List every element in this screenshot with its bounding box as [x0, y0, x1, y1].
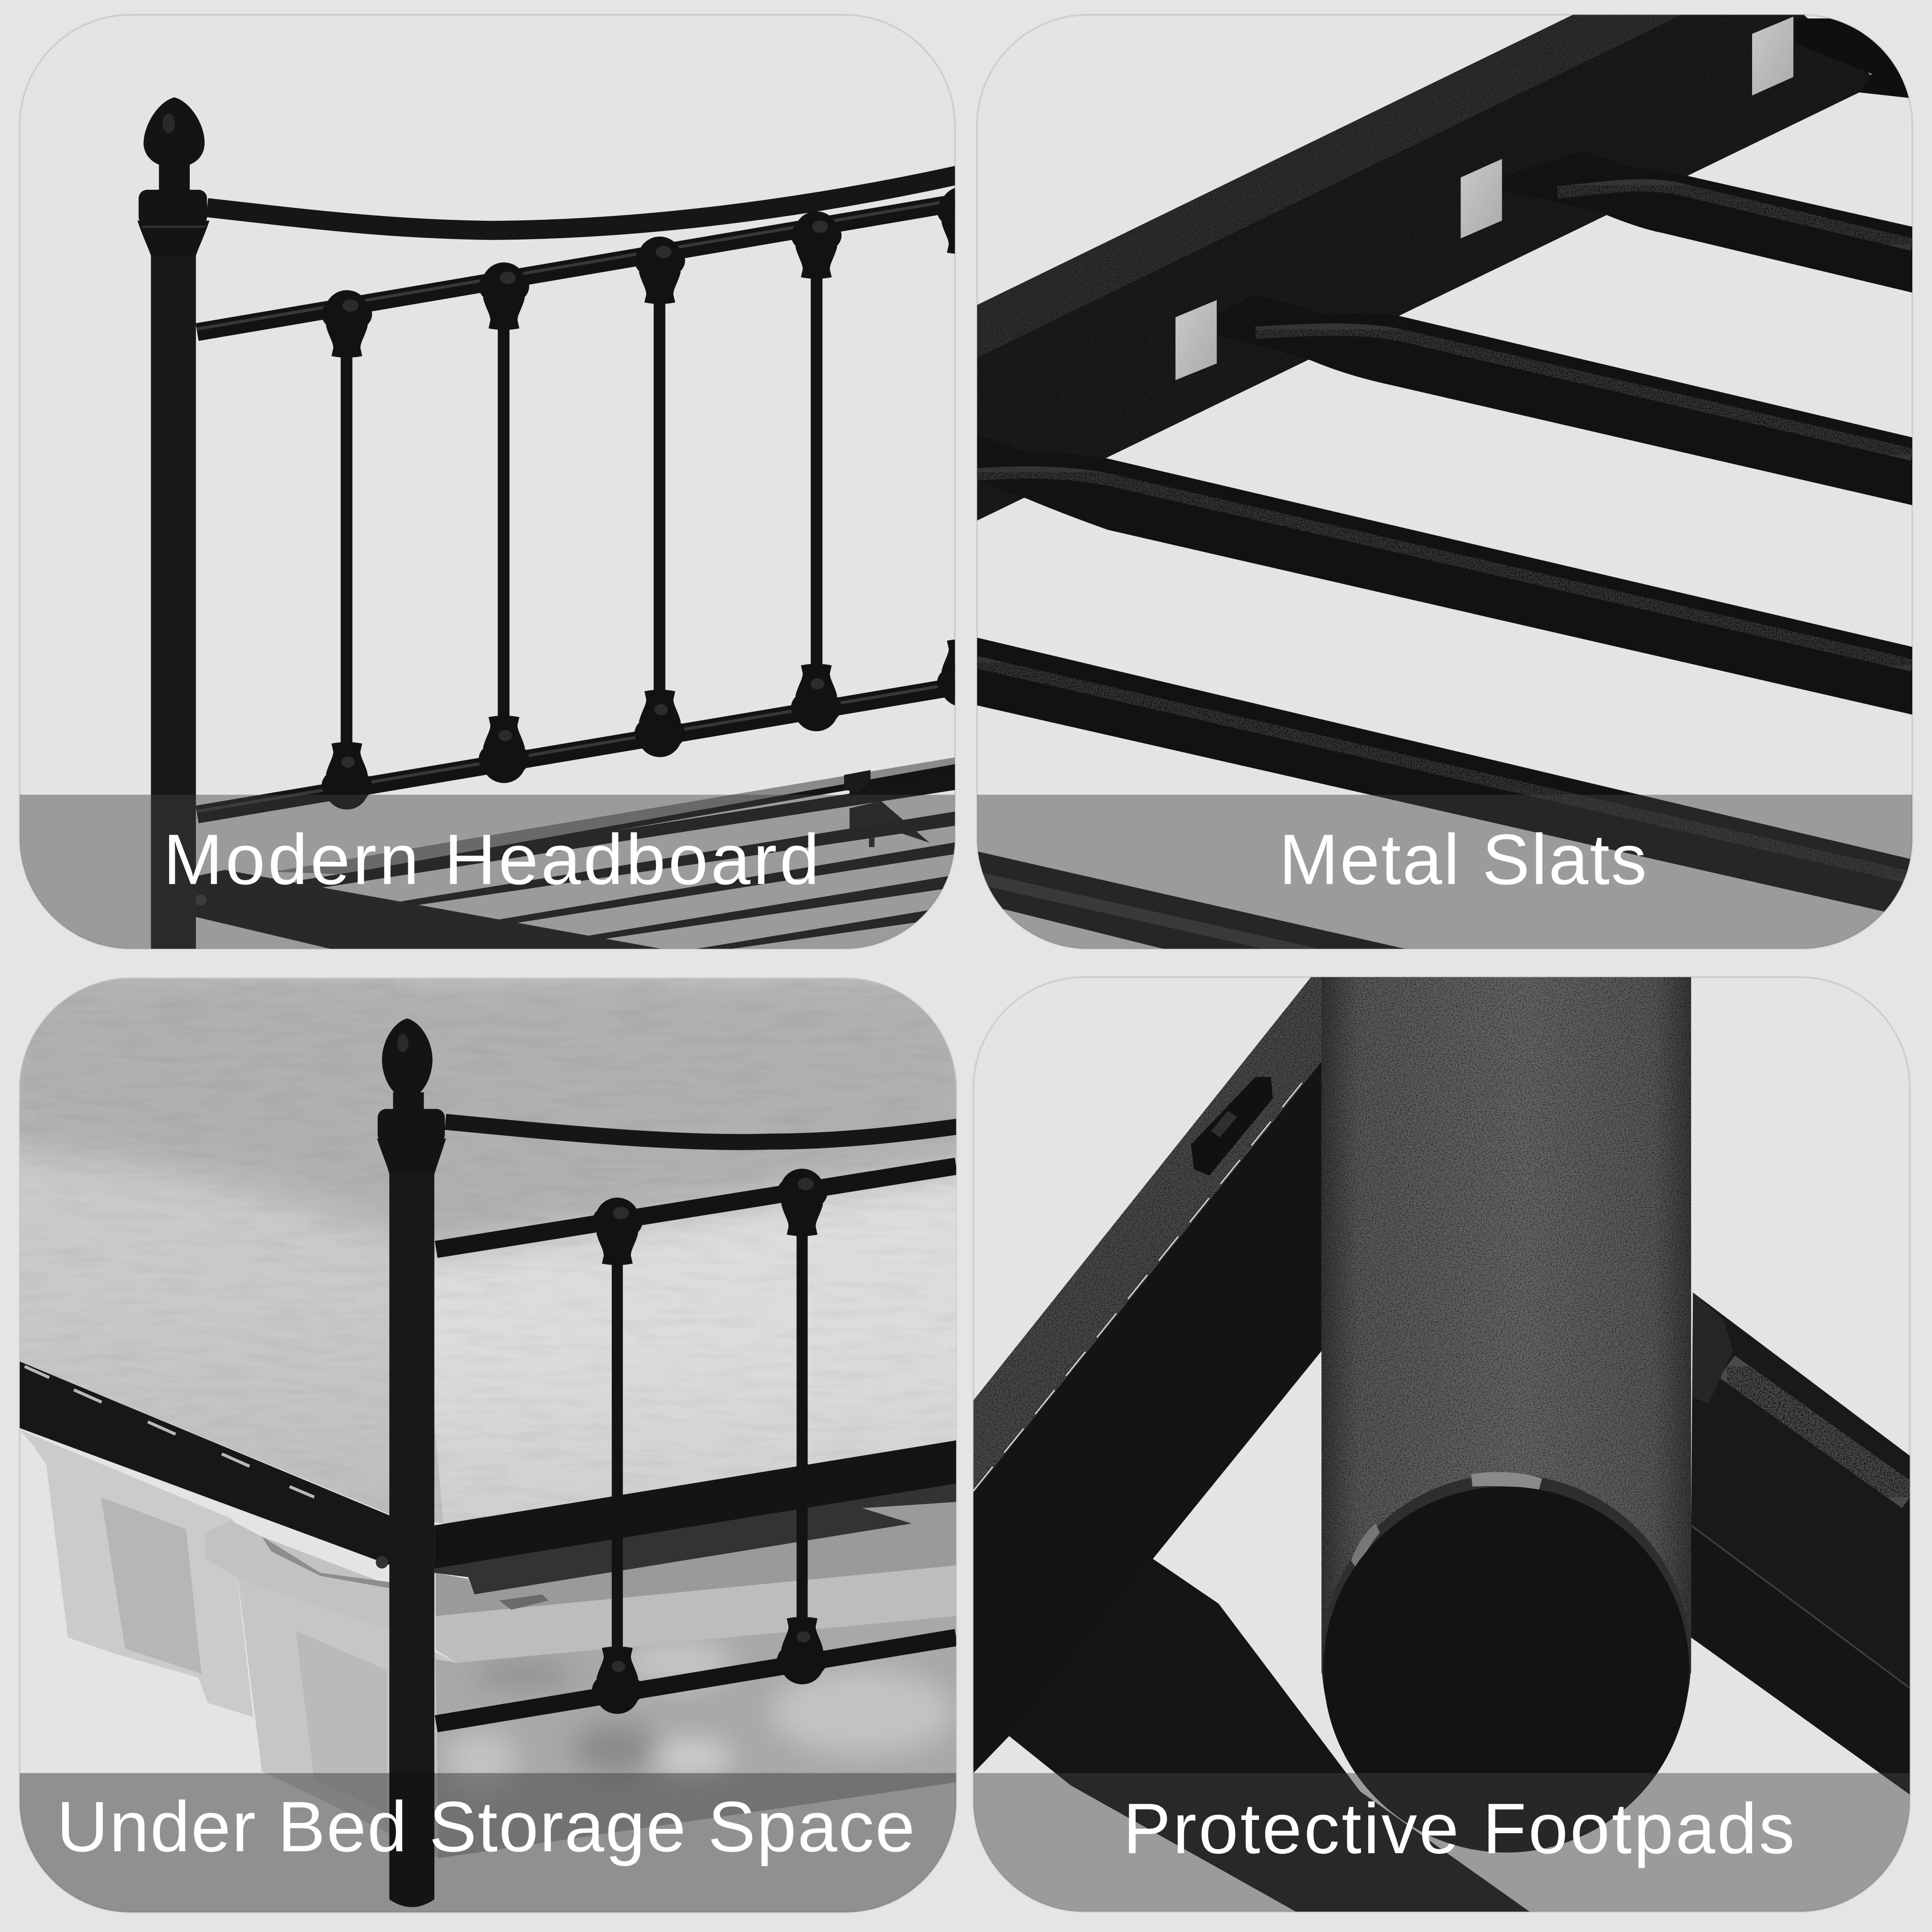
side rail and bracket: [179, 870, 668, 961]
back storage bin: [20, 1430, 259, 1717]
mattress left side: [20, 978, 444, 1524]
top curved rail: [445, 1122, 961, 1142]
caption: Protective Footpads: [1123, 1789, 1795, 1868]
mattress texture: [20, 978, 956, 1524]
frame rail front face: [308, 764, 956, 884]
panel: modern headboard: [20, 15, 987, 961]
panel: metal slats: [977, 15, 1915, 967]
caption band: [20, 795, 955, 949]
frame rail top face: [273, 757, 956, 874]
right glossy tube: [1691, 1293, 1910, 1688]
front storage bin body: [238, 1578, 956, 1858]
caption: Under Bed Storage Space: [57, 1787, 915, 1867]
far slat end: [1795, 18, 1915, 99]
tube rim: [1321, 1472, 1691, 1844]
spindles and joints: [322, 187, 987, 810]
caption band: [20, 1773, 956, 1915]
post over band: [389, 1773, 434, 1907]
right frame rail: [434, 1440, 956, 1568]
spindles and joints: [592, 1169, 827, 1714]
central tube: [1321, 977, 1691, 1673]
bed slats: [296, 777, 956, 955]
mattress right side: [394, 978, 956, 1524]
caption: Metal Slats: [1279, 820, 1647, 899]
support under slats: [850, 801, 930, 843]
lower rail: [197, 683, 961, 814]
washer: [1191, 1077, 1273, 1176]
caption: Modern Headboard: [163, 820, 819, 899]
left beam textured face: [973, 977, 1321, 1493]
left beam dark face: [973, 1061, 1321, 1773]
mattress pad corner: [444, 1516, 487, 1530]
stored blanket: [444, 1637, 955, 1792]
mattress top: [0, 966, 986, 1255]
panel: protective footpads: [973, 977, 1910, 1927]
corner post with finial: [377, 1018, 446, 1907]
bin lid: [204, 1496, 956, 1663]
corner post with finial: [137, 97, 210, 955]
slat 1: [1502, 151, 1912, 293]
slat 2: [1217, 295, 1912, 505]
upper rail: [197, 199, 961, 332]
side rail front face: [977, 15, 1890, 521]
footpad: [1323, 1487, 1689, 1853]
slat 5: [977, 851, 1459, 967]
slat 4: [977, 638, 1912, 918]
upper rail: [436, 1166, 956, 1249]
under-frame shadow: [434, 1482, 956, 1595]
rail bracket: [844, 770, 871, 792]
right lower beam: [1691, 1520, 1910, 1795]
left frame rail: [20, 1361, 394, 1568]
top curved rail: [207, 174, 961, 231]
side rail top face: [977, 15, 1681, 357]
lower rail: [436, 1637, 956, 1724]
panel: under bed storage space: [0, 966, 986, 1915]
caption band: [973, 1773, 1910, 1915]
lower left beam: [1009, 1558, 1551, 1927]
caption band: [977, 795, 1912, 949]
slat 3: [977, 434, 1912, 715]
mounting squares: [1176, 17, 1793, 380]
